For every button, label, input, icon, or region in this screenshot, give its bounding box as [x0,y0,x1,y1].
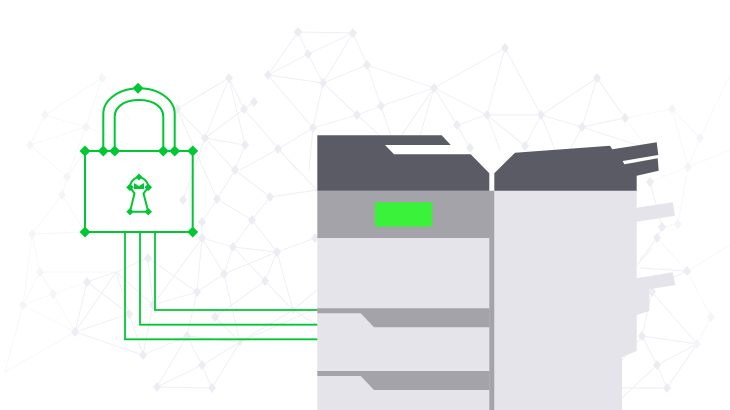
right scanner and document feeder [494,142,659,191]
left body [317,238,489,410]
right body with output trays [494,191,675,410]
lock body [85,151,193,232]
wires connecting lock to printer [125,232,318,339]
printer [317,135,675,410]
lock nodes [80,83,198,238]
left scanner lid [317,135,489,191]
lower paper drawer slot [317,371,489,390]
keyhole [126,174,152,215]
padlock icon [80,83,198,238]
upper paper drawer slot [317,308,489,327]
control panel band [317,191,494,410]
lock shackle [103,88,175,151]
green display [375,202,432,227]
